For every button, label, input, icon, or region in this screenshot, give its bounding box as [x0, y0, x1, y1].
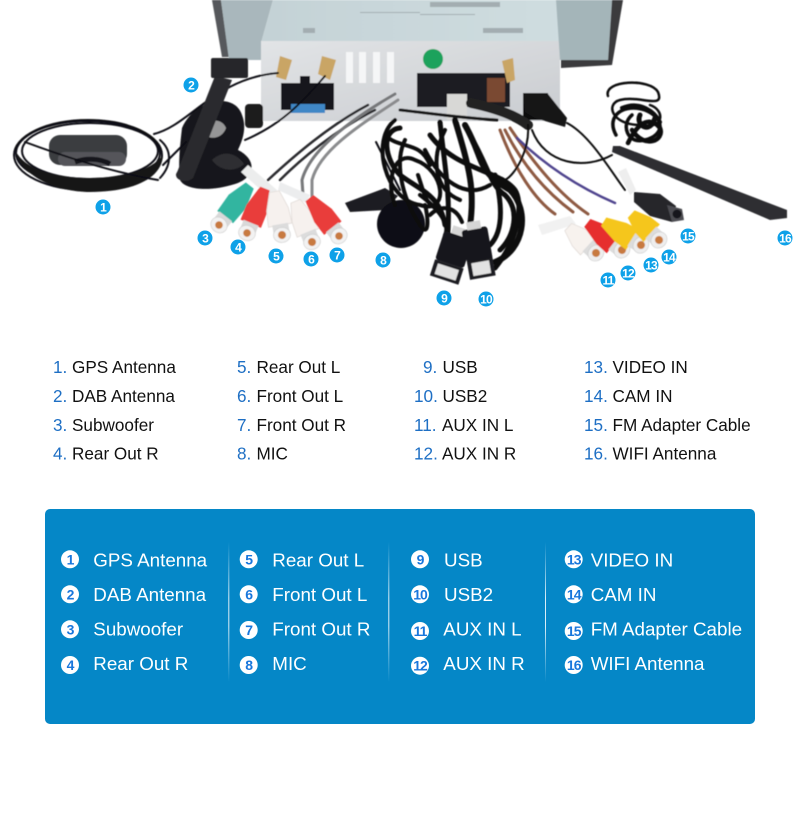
list column 1	[53, 357, 176, 464]
badge 15: 15	[682, 230, 695, 244]
list column 3: 12.	[414, 444, 438, 464]
panel icons: numbered circles: 9	[417, 551, 425, 567]
connector: 6	[284, 197, 326, 253]
panel icons: numbered circles: 16	[567, 657, 582, 673]
badge 5	[268, 248, 284, 264]
panel labels: Front Out L	[272, 584, 367, 605]
list column 4: FM Adapter Cable	[612, 415, 751, 435]
list column 2: Front Out R	[256, 415, 346, 435]
badge 13: 13	[645, 258, 658, 272]
panel icons: numbered circles: 3	[67, 621, 75, 637]
badge 9: 9	[441, 292, 448, 306]
panel labels: Rear Out L	[272, 550, 364, 571]
USB connector 10	[460, 219, 496, 280]
badge 7	[330, 248, 344, 262]
GPS antenna cable coil	[14, 120, 169, 192]
list column 3: AUX IN R	[442, 444, 516, 464]
connector: 4	[234, 184, 275, 244]
WIFI antenna	[608, 83, 787, 220]
badge 11: 11	[602, 274, 615, 288]
panel icons: numbered circles: 15	[567, 623, 582, 639]
list column 3: AUX IN L	[442, 415, 513, 435]
panel icons: numbered circles: 5	[245, 551, 253, 567]
badge 5: 5	[273, 250, 280, 264]
badge 2: 2	[188, 78, 195, 92]
badge 1	[96, 200, 110, 214]
list column 1: 3.	[53, 415, 67, 435]
list column 1: GPS Antenna	[72, 357, 176, 377]
list column 1: Subwoofer	[72, 415, 154, 435]
vents	[346, 52, 394, 83]
brown and purple RCA cables	[400, 103, 625, 235]
list column 4: 13.	[584, 357, 608, 377]
badge 8	[376, 252, 390, 268]
connector: 5	[263, 190, 295, 244]
microphone	[345, 142, 425, 248]
panel labels: VIDEO IN	[591, 550, 673, 571]
badge 3: 3	[202, 232, 209, 246]
sticker	[423, 49, 443, 69]
power cable plug	[523, 94, 567, 127]
list column 4	[584, 357, 751, 464]
numbered legend list	[53, 357, 751, 464]
list column 3: 11.	[414, 415, 437, 435]
list column 2: 7.	[237, 415, 251, 435]
gold connectors	[276, 56, 515, 83]
list column 1: Rear Out R	[72, 444, 159, 464]
DAB antenna	[154, 58, 325, 189]
badge 4	[230, 240, 246, 254]
list column 4: 16.	[584, 444, 608, 464]
list column 2: Front Out L	[256, 386, 343, 406]
list column 2: 8.	[237, 444, 251, 464]
list column 4: 15.	[584, 415, 608, 435]
list column 2: 6.	[237, 386, 251, 406]
list column 4: VIDEO IN	[612, 357, 688, 377]
badge 7: 7	[334, 248, 341, 262]
badge 9	[436, 290, 452, 306]
product photo: head unit and cables	[14, 0, 787, 285]
panel icons: numbered circles: 10	[413, 586, 428, 602]
head unit	[212, 0, 623, 121]
panel icons: numbered circles	[61, 550, 583, 675]
badge 11	[600, 272, 616, 288]
list column 1: 2.	[53, 386, 67, 406]
panel labels: Front Out R	[272, 618, 370, 639]
panel labels: USB2	[444, 584, 493, 605]
FM adapter	[618, 168, 684, 222]
panel: blue legend	[45, 509, 755, 724]
list column 4: WIFI Antenna	[612, 444, 717, 464]
number badges on photo	[96, 78, 792, 306]
panel icons: numbered circles: 4	[67, 657, 75, 673]
badge 12: 12	[622, 266, 635, 280]
badge 6	[304, 252, 318, 266]
center plug block	[417, 73, 510, 107]
list column 1: DAB Antenna	[72, 386, 175, 406]
badge 14: 14	[663, 250, 676, 264]
badge 16: 16	[779, 232, 792, 246]
list column 3: USB	[442, 357, 478, 377]
panel labels: Subwoofer	[93, 618, 183, 639]
panel icons: numbered circles: 11	[414, 623, 428, 639]
panel labels: Rear Out R	[93, 653, 188, 674]
list column 3: USB2	[442, 386, 487, 406]
badge 4: 4	[235, 240, 242, 254]
list column 2: Rear Out L	[256, 357, 340, 377]
black USB cable bundle	[383, 120, 522, 268]
badge 10: 10	[480, 292, 493, 306]
connector: 3	[206, 179, 258, 238]
panel icons: numbered circles: 6	[245, 586, 253, 602]
list column 1: 1.	[53, 357, 67, 377]
panel icons: numbered circles: 2	[67, 586, 75, 602]
connector: 14	[623, 205, 673, 254]
panel icons: numbered circles: 13	[567, 551, 582, 567]
panel labels: CAM IN	[591, 584, 656, 605]
connector: 7	[301, 191, 352, 249]
panel icons: numbered circles: 12	[413, 658, 428, 674]
left plug	[281, 83, 334, 110]
badge 1: 1	[100, 200, 107, 214]
badge 6: 6	[308, 252, 315, 266]
panel labels: USB	[444, 550, 483, 571]
USB connector 9	[430, 223, 475, 285]
list column 2: MIC	[256, 444, 288, 464]
list column 2: 5.	[237, 357, 251, 377]
panel labels: FM Adapter Cable	[591, 618, 742, 639]
panel icons: numbered circles: 8	[245, 657, 253, 673]
list column 1: 4.	[53, 444, 67, 464]
list column 4: 14.	[584, 386, 608, 406]
panel labels: AUX IN L	[443, 618, 522, 639]
panel labels: DAB Antenna	[93, 584, 207, 605]
list column 2	[237, 357, 346, 464]
badge 3	[198, 230, 212, 246]
connector: 13	[597, 212, 654, 259]
badge 2	[184, 78, 198, 92]
connector: 11	[560, 218, 610, 267]
panel icons: numbered circles: 1	[67, 551, 75, 567]
panel labels	[93, 550, 742, 674]
panel labels: MIC	[272, 653, 307, 674]
list column 3: 9.	[423, 357, 437, 377]
connector: 12	[580, 213, 635, 264]
panel labels: AUX IN R	[443, 653, 525, 674]
badge 8: 8	[380, 254, 387, 268]
panel labels: WIFI Antenna	[591, 653, 705, 674]
RCA cables, left group	[241, 94, 398, 203]
list column 3: 10.	[414, 386, 438, 406]
list column 3	[414, 357, 516, 464]
list column 4: CAM IN	[612, 386, 672, 406]
panel icons: numbered circles: 14	[567, 586, 582, 602]
panel icons: numbered circles: 7	[245, 622, 253, 638]
panel labels: GPS Antenna	[93, 550, 208, 571]
